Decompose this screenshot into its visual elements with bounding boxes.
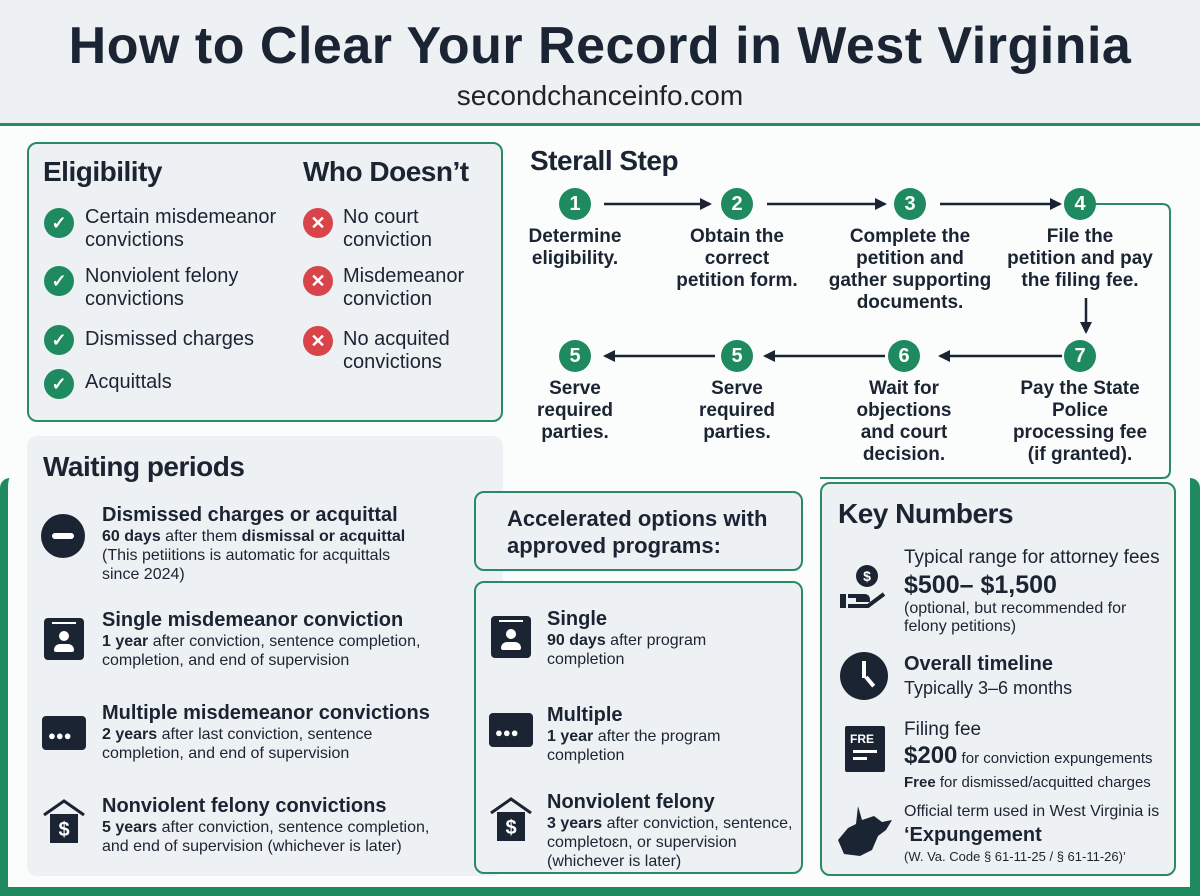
step 4 bbox=[1007, 188, 1153, 291]
step 3: Complete the bbox=[850, 226, 970, 247]
eligible list: Dismissed charges bbox=[85, 328, 254, 350]
not eligible list: ✕ bbox=[310, 213, 326, 233]
icon: minus circle bbox=[41, 514, 85, 558]
item: nonviolent felony: 5 years after conviction, sentence completion, bbox=[102, 819, 429, 836]
not eligible list bbox=[303, 206, 464, 373]
step 5a: required bbox=[537, 400, 613, 421]
item: official term: ‘Expungement bbox=[904, 824, 1042, 846]
step 2 bbox=[676, 188, 798, 291]
item: nonviolent felony bbox=[102, 795, 429, 855]
step 6: decision. bbox=[863, 444, 945, 465]
item: filing fee: $200 for conviction expungements bbox=[904, 742, 1153, 769]
step 7: processing fee bbox=[1013, 422, 1147, 443]
item: multiple misdemeanor: 2 years after last conviction, sentence bbox=[102, 726, 372, 743]
step 5b: required bbox=[699, 400, 775, 421]
step 1: Determine bbox=[529, 226, 621, 247]
item: dismissed: (This petiitions is automatic for acquittals bbox=[102, 547, 390, 564]
item: attorney fees: $500– $1,500 bbox=[904, 571, 1057, 599]
item: official term: Official term used in West Virginia is bbox=[904, 803, 1159, 820]
not eligible list: ✕ bbox=[310, 271, 326, 291]
step 1: eligibility. bbox=[532, 248, 618, 269]
item: single misdemeanor: Single misdemeanor conviction bbox=[102, 609, 403, 631]
title: How to Clear Your Record in West Virginia bbox=[69, 17, 1131, 75]
not eligible list: No acquited bbox=[343, 328, 450, 350]
eligible list: ✓ bbox=[51, 271, 67, 291]
step 3: 3 bbox=[904, 193, 916, 215]
step 2: correct bbox=[705, 248, 769, 269]
item: single misdemeanor bbox=[102, 609, 420, 669]
step 3: gather supporting bbox=[829, 270, 991, 291]
step 5b: Serve bbox=[711, 378, 763, 399]
item: nonviolent felony: and end of supervision (whichever is later) bbox=[102, 838, 402, 855]
item: filing fee: Filing fee bbox=[904, 719, 981, 740]
icon: hand coin bbox=[840, 565, 886, 608]
step arrows bbox=[603, 198, 1171, 479]
panel: steps: documents. bbox=[857, 292, 963, 313]
item: felony: 3 years after conviction, sentence, bbox=[547, 815, 792, 832]
icon: group: ●●● bbox=[48, 728, 72, 743]
item: single: 90 days after program bbox=[547, 632, 706, 649]
icon: receipt: FRE bbox=[850, 732, 874, 746]
heading: who doesn't: Who Doesn’t bbox=[303, 156, 469, 187]
item: multiple: Multiple bbox=[547, 704, 623, 726]
item: filing fee bbox=[904, 719, 1153, 791]
step 5b: 5 bbox=[731, 345, 743, 367]
item: single bbox=[547, 608, 706, 668]
item: felony: Nonviolent felony bbox=[547, 791, 715, 813]
panel: key numbers bbox=[820, 482, 1176, 876]
step 5a: Serve bbox=[549, 378, 601, 399]
item: dismissed: 60 days after them dismissal or acquittal bbox=[102, 528, 405, 545]
heading: key numbers: Key Numbers bbox=[838, 498, 1013, 529]
panel: accelerated options bbox=[474, 581, 803, 874]
step 7: Pay the State bbox=[1020, 378, 1140, 399]
not eligible list: convictions bbox=[343, 351, 442, 373]
step 7: (if granted). bbox=[1028, 444, 1132, 465]
item: single: Single bbox=[547, 608, 607, 630]
icon: group bbox=[42, 716, 86, 750]
eligible list: Certain misdemeanor bbox=[85, 206, 276, 228]
icon: receipt bbox=[845, 726, 885, 772]
step 7 bbox=[1013, 340, 1147, 465]
item: timeline bbox=[904, 653, 1072, 698]
icon: house dollar bbox=[490, 797, 532, 841]
item: multiple misdemeanor: Multiple misdemeanor convictions bbox=[102, 702, 430, 724]
step 1 bbox=[529, 188, 621, 269]
item: filing fee: Free for dismissed/acquitted charges bbox=[904, 774, 1151, 791]
item: timeline: Overall timeline bbox=[904, 653, 1053, 675]
icon: west virginia bbox=[838, 806, 892, 856]
panel: steps: parties. bbox=[541, 422, 609, 443]
item: dismissed: Dismissed charges or acquittal bbox=[102, 504, 398, 526]
not eligible list: ✕ bbox=[310, 331, 326, 351]
step 4: 4 bbox=[1074, 193, 1086, 215]
item: timeline: Typically 3–6 months bbox=[904, 678, 1072, 698]
icon: house dollar bbox=[43, 799, 85, 843]
icon: house dollar: $ bbox=[58, 819, 70, 841]
item: felony bbox=[547, 791, 792, 870]
icon: clock bbox=[840, 652, 888, 700]
eligible list: Acquittals bbox=[85, 371, 172, 393]
step 7: 7 bbox=[1074, 345, 1086, 367]
eligible list: ✓ bbox=[51, 374, 67, 394]
eligible list: ✓ bbox=[51, 213, 67, 233]
item: attorney fees: Typical range for attorney fees bbox=[904, 547, 1160, 568]
panel: steps bbox=[529, 145, 1171, 479]
eligible list: convictions bbox=[85, 229, 184, 251]
step 4: petition and pay bbox=[1007, 248, 1153, 269]
not eligible list: Misdemeanor bbox=[343, 265, 464, 287]
item: official term: (W. Va. Code § 61-11-25 / § 61-11-26)’ bbox=[904, 849, 1126, 864]
panel: eligibility bbox=[27, 142, 503, 422]
heading: steps: Sterall Step bbox=[530, 145, 678, 176]
eligible list bbox=[44, 206, 276, 399]
item: single misdemeanor: completion, and end of supervision bbox=[102, 652, 349, 669]
step 6: Wait for bbox=[869, 378, 939, 399]
icon: group: ●●● bbox=[495, 725, 519, 740]
icon: house dollar: $ bbox=[505, 817, 517, 839]
item: dismissed bbox=[102, 504, 405, 583]
not eligible list: No court bbox=[343, 206, 419, 228]
item: attorney fees: (optional, but recommended for bbox=[904, 600, 1126, 617]
step 5a bbox=[537, 340, 613, 443]
item: attorney fees: felony petitions) bbox=[904, 618, 1016, 635]
step 2: Obtain the bbox=[690, 226, 784, 247]
panel: steps: the filing fee. bbox=[1021, 270, 1139, 291]
icon: id badge bbox=[44, 618, 84, 660]
panel: accelerated header bbox=[474, 491, 803, 571]
panel: accelerated header: Accelerated options with bbox=[507, 506, 767, 531]
not eligible list: conviction bbox=[343, 229, 432, 251]
item: multiple: 1 year after the program bbox=[547, 728, 720, 745]
step 3 bbox=[829, 188, 991, 313]
item: official term bbox=[904, 803, 1159, 864]
item: felony: (whichever is later) bbox=[547, 853, 681, 870]
item: nonviolent felony: Nonviolent felony convictions bbox=[102, 795, 386, 817]
eligible list: ✓ bbox=[51, 330, 67, 350]
panel: accelerated header: approved programs: bbox=[507, 533, 721, 558]
subtitle: secondchanceinfo.com bbox=[457, 80, 743, 111]
step 5b bbox=[699, 340, 775, 443]
panel: steps: parties. bbox=[703, 422, 771, 443]
item: multiple bbox=[547, 704, 720, 764]
step 3: petition and bbox=[856, 248, 964, 269]
not eligible list: conviction bbox=[343, 288, 432, 310]
icon: hand coin: $ bbox=[863, 568, 871, 584]
heading: eligibility: Eligibility bbox=[43, 156, 162, 187]
step 6 bbox=[856, 340, 952, 465]
item: single: completion bbox=[547, 651, 624, 668]
item: single misdemeanor: 1 year after conviction, sentence completion, bbox=[102, 633, 420, 650]
icon: group bbox=[489, 713, 533, 747]
step 6: 6 bbox=[898, 345, 910, 367]
step 4: File the bbox=[1047, 226, 1113, 247]
step 6: objections bbox=[856, 400, 952, 421]
step 7: Police bbox=[1052, 400, 1108, 421]
outer frame bbox=[0, 478, 1200, 896]
icon: badge bbox=[491, 616, 531, 658]
step 1: 1 bbox=[569, 193, 581, 215]
step 6: and court bbox=[861, 422, 947, 443]
heading: waiting periods: Waiting periods bbox=[43, 451, 244, 482]
eligible list: Nonviolent felony bbox=[85, 265, 238, 287]
panel: waiting periods bbox=[27, 436, 503, 876]
header band bbox=[0, 0, 1200, 126]
item: dismissed: since 2024) bbox=[102, 566, 185, 583]
item: felony: completoɛn, or supervision bbox=[547, 834, 737, 851]
panel: steps: petition form. bbox=[676, 270, 798, 291]
step 2: 2 bbox=[731, 193, 743, 215]
item: multiple misdemeanor: completion, and end of supervision bbox=[102, 745, 349, 762]
eligible list: convictions bbox=[85, 288, 184, 310]
item: attorney fees bbox=[904, 547, 1160, 635]
item: multiple misdemeanor bbox=[102, 702, 430, 762]
item: multiple: completion bbox=[547, 747, 624, 764]
step 5a: 5 bbox=[569, 345, 581, 367]
